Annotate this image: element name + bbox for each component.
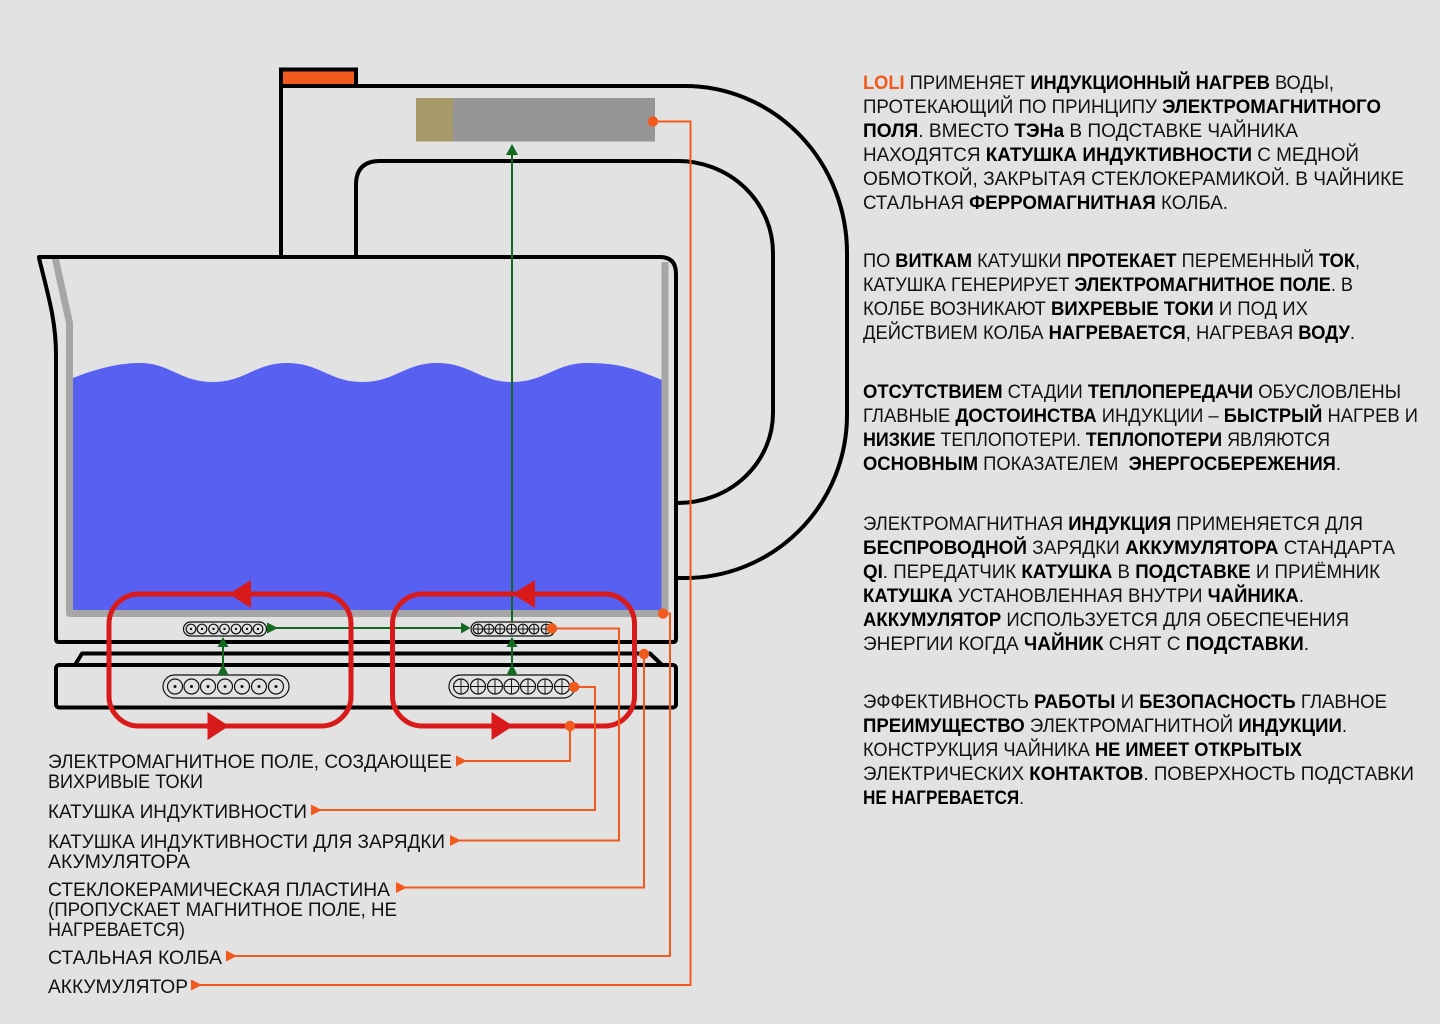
label: charging coil: АКУМУЛЯТОРА xyxy=(48,852,190,873)
text block: paragraph 1 xyxy=(863,72,1404,214)
label: electromagnetic field: ВИХРИВЫЕ ТОКИ xyxy=(48,772,203,793)
text block: paragraph 4: КАТУШКА УСТАНОВЛЕННАЯ ВНУТРИ ЧАЙНИКА. xyxy=(863,585,1304,607)
text block: paragraph 4: QI. ПЕРЕДАТЧИК КАТУШКА В ПОДСТАВКЕ И ПРИЁМНИК xyxy=(863,562,1380,583)
label: glass ceramic plate: НАГРЕВАЕТСЯ) xyxy=(48,920,185,941)
steel flask xyxy=(55,257,665,614)
text block: paragraph 3: ОСНОВНЫМ ПОКАЗАТЕЛЕМ ЭНЕРГОСБЕРЕЖЕНИЯ. xyxy=(863,454,1341,475)
label: battery: АККУМУЛЯТОР xyxy=(48,977,188,998)
water xyxy=(73,363,662,611)
text block: paragraph 1: СТАЛЬНАЯ ФЕРРОМАГНИТНАЯ КОЛБА. xyxy=(863,193,1228,214)
text block: paragraph 1: ОБМОТКОЙ, ЗАКРЫТАЯ СТЕКЛОКЕРАМИКОЙ. В ЧАЙНИКЕ xyxy=(863,168,1404,190)
text block: paragraph 2: КАТУШКА ГЕНЕРИРУЕТ ЭЛЕКТРОМАГНИТНОЕ ПОЛЕ. В xyxy=(863,275,1353,296)
label: charging coil: КАТУШКА ИНДУКТИВНОСТИ ДЛЯ ЗАРЯДКИ xyxy=(48,832,445,853)
kettle illustration xyxy=(39,70,847,708)
label: electromagnetic field: ЭЛЕКТРОМАГНИТНОЕ ПОЛЕ, СОЗДАЮЩЕЕ xyxy=(48,752,452,773)
text block: paragraph 2 xyxy=(863,250,1360,344)
text block: paragraph 1: ПРОТЕКАЮЩИЙ ПО ПРИНЦИПУ ЭЛЕКТРОМАГНИТНОГО xyxy=(863,96,1381,118)
label: induction coil: КАТУШКА ИНДУКТИВНОСТИ xyxy=(48,802,307,823)
green induction arrows xyxy=(218,144,518,675)
label: glass ceramic plate: (ПРОПУСКАЕТ МАГНИТНОЕ ПОЛЕ, НЕ xyxy=(48,900,397,921)
text block: paragraph 3: ОТСУТСТВИЕМ СТАДИИ ТЕПЛОПЕРЕДАЧИ ОБУСЛОВЛЕНЫ xyxy=(863,382,1401,403)
text block: paragraph 1: ПОЛЯ. ВМЕСТО ТЭНа В ПОДСТАВКЕ ЧАЙНИКА xyxy=(863,120,1298,142)
text block: paragraph 5: КОНСТРУКЦИЯ ЧАЙНИКА НЕ ИМЕЕТ ОТКРЫТЫХ xyxy=(863,739,1302,761)
battery xyxy=(416,98,655,142)
label: charging coil xyxy=(48,832,445,873)
inner handle xyxy=(356,161,773,503)
text block: paragraph 2: КОЛБЕ ВОЗНИКАЮТ ВИХРЕВЫЕ ТОКИ И ПОД ИХ xyxy=(863,299,1308,320)
base stand xyxy=(56,665,676,708)
label: electromagnetic field xyxy=(48,752,452,793)
text block: paragraph 2: ДЕЙСТВИЕМ КОЛБА НАГРЕВАЕТСЯ, НАГРЕВАЯ ВОДУ. xyxy=(863,322,1355,344)
left coils with dot symbols xyxy=(163,622,289,698)
red electromagnetic field loops xyxy=(109,580,634,740)
text block: paragraph 4: ЭНЕРГИИ КОГДА ЧАЙНИК СНЯТ С ПОДСТАВКИ. xyxy=(863,633,1309,655)
text block: paragraph 1: LOLI ПРИМЕНЯЕТ ИНДУКЦИОННЫЙ НАГРЕВ ВОДЫ, xyxy=(863,72,1334,94)
lid button xyxy=(281,70,356,86)
text block: paragraph 4 xyxy=(863,514,1395,655)
text block: paragraph 2: ПО ВИТКАМ КАТУШКИ ПРОТЕКАЕТ ПЕРЕМЕННЫЙ ТОК, xyxy=(863,250,1360,272)
legend labels xyxy=(48,752,452,998)
text block: paragraph 5: ЭЛЕКТРИЧЕСКИХ КОНТАКТОВ. ПОВЕРХНОСТЬ ПОДСТАВКИ xyxy=(863,764,1414,785)
right coils with cross symbols xyxy=(449,622,575,698)
text block: paragraph 4: ЭЛЕКТРОМАГНИТНАЯ ИНДУКЦИЯ ПРИМЕНЯЕТСЯ ДЛЯ xyxy=(863,514,1363,535)
text block: paragraph 3 xyxy=(863,382,1418,475)
text block: paragraph 5: ПРЕИМУЩЕСТВО ЭЛЕКТРОМАГНИТНОЙ ИНДУКЦИИ. xyxy=(863,715,1347,737)
orange leader lines xyxy=(191,116,690,991)
kettle body outline xyxy=(39,257,676,642)
text block: paragraph 5: НЕ НАГРЕВАЕТСЯ. xyxy=(863,788,1024,809)
label: glass ceramic plate xyxy=(48,880,397,941)
text block: paragraph 5 xyxy=(863,692,1414,809)
glass ceramic plate xyxy=(75,654,662,665)
lid and outer handle xyxy=(281,86,847,578)
text block: paragraph 4: АККУМУЛЯТОР ИСПОЛЬЗУЕТСЯ ДЛЯ ОБЕСПЕЧЕНИЯ xyxy=(863,610,1349,631)
label: glass ceramic plate: СТЕКЛОКЕРАМИЧЕСКАЯ ПЛАСТИНА xyxy=(48,880,390,901)
text block: paragraph 1: НАХОДЯТСЯ КАТУШКА ИНДУКТИВНОСТИ С МЕДНОЙ xyxy=(863,144,1359,166)
text block: paragraph 3: НИЗКИЕ ТЕПЛОПОТЕРИ. ТЕПЛОПОТЕРИ ЯВЛЯЮТСЯ xyxy=(863,430,1330,451)
label: steel flask: СТАЛЬНАЯ КОЛБА xyxy=(48,948,222,969)
text block: paragraph 5: ЭФФЕКТИВНОСТЬ РАБОТЫ И БЕЗОПАСНОСТЬ ГЛАВНОЕ xyxy=(863,692,1387,713)
text block: paragraph 4: БЕСПРОВОДНОЙ ЗАРЯДКИ АККУМУЛЯТОРА СТАНДАРТА xyxy=(863,537,1395,559)
text block: paragraph 3: ГЛАВНЫЕ ДОСТОИНСТВА ИНДУКЦИИ – БЫСТРЫЙ НАГРЕВ И xyxy=(863,405,1418,427)
